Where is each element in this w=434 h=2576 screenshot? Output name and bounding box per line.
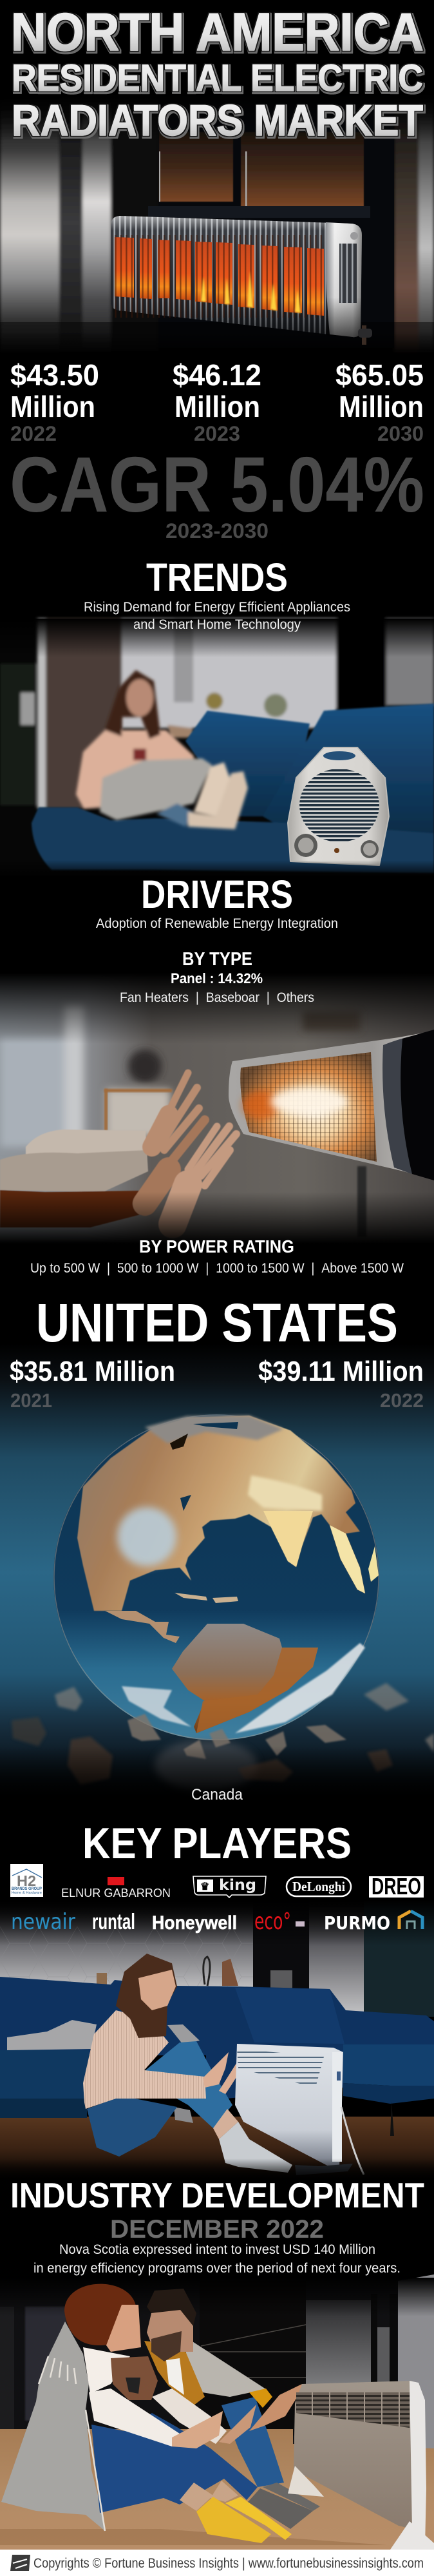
heading: industry development: in energy efficiency programs over the period of next four years. xyxy=(33,2261,401,2276)
heading: by power rating: Up to 500 W | 500 to 1000 W | 1000 to 1500 W | Above 1500 W xyxy=(30,1261,404,1276)
knit fringe xyxy=(39,2356,105,2531)
logo: Purmo: PURMO xyxy=(324,1912,390,1934)
stat: US 2021: $35.81 Million xyxy=(10,1356,175,1387)
icon: infrared heater xyxy=(229,1030,434,1180)
logo: King xyxy=(193,1876,266,1898)
hands and sleeves xyxy=(0,1073,236,1227)
stat: 2023 market size xyxy=(173,358,261,445)
stat: 2030 market size: $65.05 xyxy=(335,358,424,392)
heading: drivers: DRIVERS xyxy=(141,872,293,916)
logo: H2 Brands Group: BRANDS GROUP xyxy=(12,1887,42,1891)
icon: Fortune Business Insights logo xyxy=(10,2555,30,2571)
logo: Honeywell: Honeywell xyxy=(152,1912,237,1934)
logo: Runtal: runtal xyxy=(92,1910,135,1934)
stat: US 2021 xyxy=(10,1356,175,1412)
woman xyxy=(83,1954,292,2173)
stat: 2030 market size: 2030 xyxy=(377,422,424,445)
heading: trends: Rising Demand for Energy Efficient Appliances xyxy=(84,600,350,615)
panel: woman warming at panel heater xyxy=(0,1901,434,2181)
stat: 2023 market size: Million xyxy=(175,390,260,423)
orange heating elements xyxy=(115,235,325,318)
back hand xyxy=(152,1073,199,1150)
stat: 2022 market size: Million xyxy=(10,390,95,423)
title xyxy=(11,2,424,145)
icon: radiator xyxy=(111,216,372,345)
heading: by type: BY TYPE xyxy=(182,949,252,970)
heading: by type xyxy=(120,949,314,1005)
CAGR headline: 2023-2030 xyxy=(165,519,269,543)
heading: by type: Fan Heaters | Baseboar | Others xyxy=(120,990,314,1005)
room background xyxy=(0,619,434,809)
stat: 2022 market size: 2022 xyxy=(10,422,57,445)
heading: trends xyxy=(84,555,350,632)
stat: 2022 market size xyxy=(10,358,99,445)
panel: glass globe xyxy=(0,1343,434,1801)
heading: key players: KEY PLAYERS xyxy=(82,1819,352,1868)
logo: Eco: eco° xyxy=(254,1908,291,1935)
panel: couple warming at radiator xyxy=(0,2274,434,2550)
heading: trends: TRENDS xyxy=(146,555,288,599)
people xyxy=(1,2284,320,2543)
stat: US 2021: 2021 xyxy=(10,1389,52,1412)
icon: panel heater xyxy=(235,2044,364,2175)
globe xyxy=(53,1414,379,1740)
panel: hands warming at infrared heater xyxy=(0,973,434,1244)
heading: drivers: Adoption of Renewable Energy Integration xyxy=(96,916,338,931)
icon: convector heater xyxy=(288,2381,434,2550)
label: Canada: Canada xyxy=(191,1786,243,1803)
northern landmass xyxy=(77,1416,365,1611)
stat: 2030 market size: Million xyxy=(339,390,424,423)
stat: 2023 market size: $46.12 xyxy=(173,358,261,392)
panel: radiator window scene xyxy=(0,93,434,358)
logo: H2 Brands Group: H2 xyxy=(17,1872,36,1889)
icon: fan heater xyxy=(288,747,389,865)
heading: drivers xyxy=(96,872,338,931)
glass reflections xyxy=(122,1686,191,1727)
blanket xyxy=(7,2020,200,2123)
heading: by power rating: BY POWER RATING xyxy=(139,1236,294,1256)
logo: King: ♛ xyxy=(200,1881,209,1892)
woman xyxy=(76,670,248,829)
stat: 2023 market size: 2023 xyxy=(194,422,240,445)
heading: by type: Panel : 14.32% xyxy=(171,970,263,986)
logo: H2 Brands Group xyxy=(10,1864,43,1897)
logo: DeLonghi: DeLonghi xyxy=(292,1879,345,1894)
heading: industry development xyxy=(10,2175,424,2276)
heading: by power rating xyxy=(30,1236,404,1276)
ice chunks xyxy=(12,1683,434,1791)
stat: 2022 market size: $43.50 xyxy=(10,358,99,392)
sofa xyxy=(0,1977,434,2181)
logo: Elnur Gabarron: ELNUR GABARRON xyxy=(61,1887,171,1899)
logo: Newair: newair xyxy=(11,1909,75,1935)
South America xyxy=(172,1624,318,1733)
logo row: key players xyxy=(10,1864,424,1935)
sofa xyxy=(32,704,434,873)
background wall and window xyxy=(0,93,434,351)
heading: industry development: DECEMBER 2022 xyxy=(110,2215,324,2244)
heading: industry development: Nova Scotia expressed intent to invest USD 140 Million xyxy=(59,2242,375,2257)
logo: Elnur Gabarron xyxy=(61,1877,171,1899)
middle hand xyxy=(145,1120,205,1204)
logo: H2 Brands Group: Home & Hardware xyxy=(12,1891,42,1895)
stat: 2030 market size xyxy=(335,358,424,445)
logo: King: king xyxy=(219,1877,256,1894)
footer xyxy=(0,2550,434,2576)
room xyxy=(0,2274,434,2550)
stat: US 2022 xyxy=(258,1356,424,1412)
stat: US 2022: 2022 xyxy=(380,1389,424,1412)
panel: woman on sofa with fan heater xyxy=(0,619,434,879)
front hand xyxy=(173,1126,236,1224)
heading: trends: and Smart Home Technology xyxy=(133,617,301,632)
